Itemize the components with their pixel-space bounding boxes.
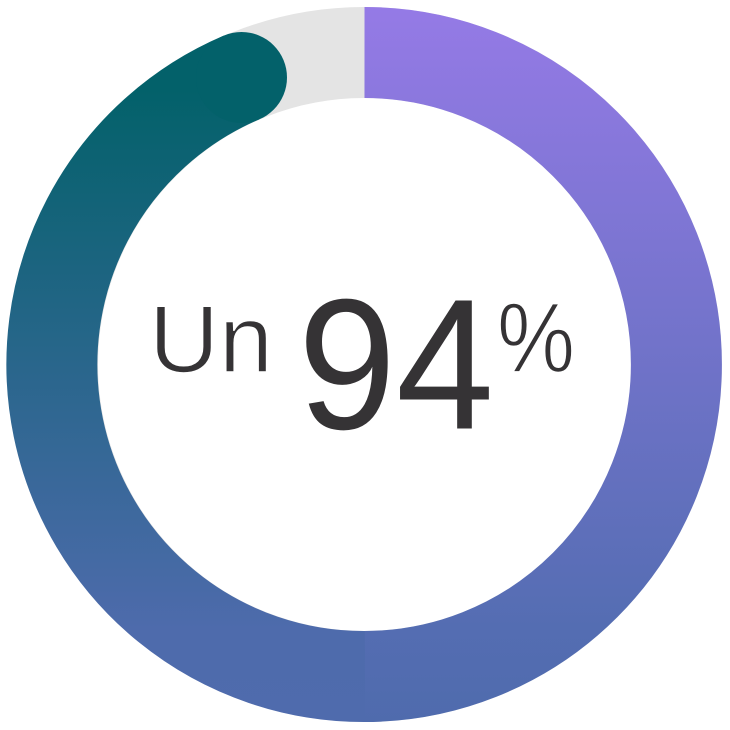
center label: Un 94%: %	[497, 282, 575, 393]
donut track: remaining 6 percent	[52, 52, 676, 676]
center label: Un 94%: 94	[298, 262, 494, 468]
center label: Un 94%	[149, 262, 575, 468]
center label: Un 94%: Un	[149, 286, 273, 393]
donut value arc: 94 percent	[52, 32, 676, 677]
